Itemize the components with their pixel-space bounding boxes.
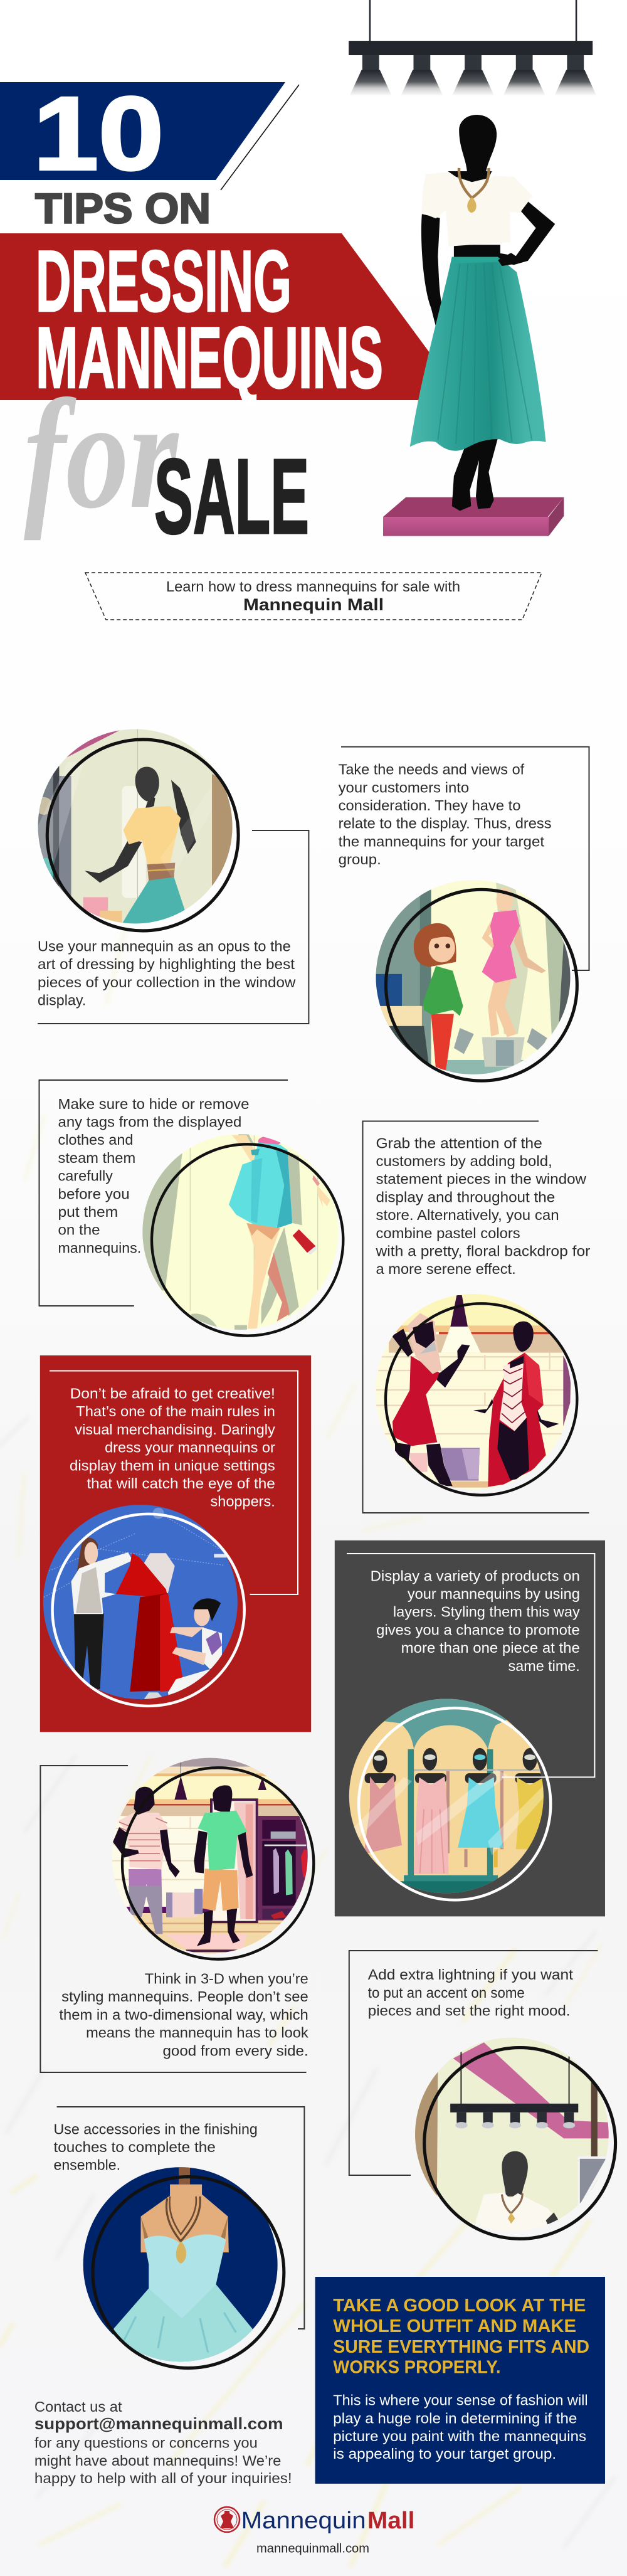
heading: final tip: [333, 2296, 589, 2378]
panel: tip 7 think in 3-D: [40, 1756, 314, 2072]
banner: number 10: [0, 76, 299, 192]
text: final tip body: This is where your sense of fashion will: [333, 2392, 588, 2409]
text: tip 9: Use accessories in the finishing: [54, 2121, 258, 2137]
callout: intro with dashed frame: Learn how to dress mannequins for sale with: [166, 578, 460, 595]
text: tip 7: [59, 1971, 308, 2059]
illustration: mannequin in window: [35, 726, 238, 931]
text: tip 3: put them: [58, 1204, 118, 1220]
text: tip 5: Don’t be afraid to get creative!: [70, 1385, 275, 1401]
pedestal: [383, 497, 564, 536]
text: tip 3: before you: [58, 1185, 130, 1202]
text: tip 3: steam them: [58, 1150, 135, 1166]
panel: tip 4 statement pieces: [362, 1121, 591, 1513]
panel: final tip on navy: [315, 2277, 605, 2484]
callout: intro with dashed frame: Mannequin Mall: [243, 595, 384, 614]
text: tip 5: shoppers.: [211, 1493, 275, 1510]
heading: final tip: WHOLE OUTFIT AND MAKE: [333, 2316, 576, 2336]
heading: tips on: TIPS ON: [35, 184, 211, 232]
panel: tip 1 window display: [35, 726, 308, 1024]
text: tip 3: on the: [58, 1222, 100, 1238]
text: tip 4: [375, 1135, 591, 1277]
text: tip 4: customers by adding bold,: [376, 1153, 552, 1169]
text: tip 2: relate to the display. Thus, dress: [339, 815, 552, 832]
text: contact information: happy to help with all of your inquiries!: [34, 2470, 292, 2486]
text: contact information: [34, 2398, 292, 2486]
text: tip 9: touches to complete the: [54, 2139, 216, 2155]
text: tip 1: pieces of your collection in the window: [38, 974, 296, 990]
text: tip 6: [371, 1567, 580, 1674]
text: tip 3: [58, 1096, 249, 1256]
text: tip 1: [38, 938, 296, 1009]
text: tip 3: Make sure to hide or remove: [58, 1096, 249, 1112]
text: tip 6: layers. Styling them this way: [393, 1604, 580, 1620]
text: tip 4: display and throughout the: [376, 1189, 555, 1205]
text: tip 6: gives you a chance to promote: [376, 1621, 580, 1638]
text: tip 4: with a pretty, floral backdrop for: [375, 1243, 591, 1259]
text: tip 4: statement pieces in the window: [376, 1171, 586, 1187]
text: tip 9: [54, 2121, 258, 2173]
panel: tip 9 accessories: [54, 2107, 304, 2368]
heading: for sale: SALE: [154, 437, 309, 556]
text: tip 7: styling mannequins. People don’t see: [61, 1988, 308, 2005]
callout: intro with dashed frame: [85, 573, 542, 620]
text: tip 3: any tags from the displayed: [58, 1114, 241, 1130]
text: tip 5: [70, 1385, 275, 1510]
banner: number 10: 10: [33, 76, 164, 192]
text: final tip body: play a huge role in determining if the: [333, 2410, 577, 2426]
text: tip 5: visual merchandising. Daringly: [75, 1421, 275, 1438]
illustration: accent lighting over mannequin: [412, 2037, 616, 2239]
text: tip 5: dress your mannequins or: [105, 1439, 275, 1456]
text: tip 1: art of dressing by highlighting the best: [38, 956, 295, 972]
text: tip 7: good from every side.: [163, 2042, 308, 2059]
text: contact information: support@mannequinmall.com: [34, 2414, 283, 2433]
text: tip 8: Add extra lightning if you want: [368, 1966, 574, 1983]
panel: tip 6 layers: [335, 1540, 605, 1916]
text: tip 4: Grab the attention of the: [376, 1135, 542, 1151]
text: tip 7: Think in 3-D when you’re: [145, 1971, 308, 1987]
text: tip 3: mannequins.: [58, 1239, 141, 1256]
text: tip 5: that will catch the eye of the: [87, 1475, 275, 1492]
text: final tip body: is appealing to your target group.: [333, 2446, 556, 2462]
heading: for sale: [24, 368, 309, 556]
text: tip 4: store. Alternatively, you can: [376, 1207, 559, 1223]
logo: Mannequin Mall: Mall: [367, 2508, 414, 2534]
text: tip 1: display.: [38, 992, 86, 1009]
text: tip 2: group.: [339, 851, 381, 867]
text: tip 6: same time.: [508, 1658, 580, 1674]
text: tip 3: clothes and: [58, 1132, 133, 1148]
text: tip 8: to put an accent on some: [368, 1985, 525, 2001]
heading: final tip: TAKE A GOOD LOOK AT THE: [333, 2296, 586, 2316]
text: tip 2: Take the needs and views of: [339, 761, 525, 778]
illustration: girl looking at mannequin: [374, 878, 577, 1081]
text: tip 4: combine pastel colors: [376, 1225, 520, 1241]
logo: Mannequin Mall: [214, 2507, 414, 2534]
text: tip 8: pieces and set the right mood.: [368, 2002, 571, 2018]
panel: tip 8 lighting: [349, 1951, 616, 2239]
panel: tip 2 customers: [339, 747, 589, 1081]
text: tip 2: consideration. They have to: [339, 797, 520, 814]
banner: dressing mannequins: DRESSING: [36, 233, 292, 330]
text: tip 8: [368, 1966, 574, 2018]
illustration: male mannequins in store: [111, 1756, 314, 1959]
text: contact information: Contact us at: [34, 2398, 122, 2415]
text: tip 5: display them in unique settings: [70, 1457, 275, 1473]
logo: Mannequin Mall: Mannequin: [241, 2508, 366, 2534]
text: tip 2: [339, 761, 552, 867]
illustration: skirt with tag: [141, 1133, 343, 1336]
text: final tip body: picture you paint with the mannequins: [333, 2428, 586, 2444]
heading: for sale: for: [24, 368, 179, 541]
illustration: bold red outfits: [374, 1292, 577, 1495]
text: tip 1: Use your mannequin as an opus to the: [38, 938, 291, 955]
text: final tip body: [333, 2392, 588, 2462]
illustration: stylists dressing a form: [40, 1503, 245, 1706]
text: contact information: for any questions or concerns you: [34, 2434, 258, 2451]
text: tip 3: carefully: [58, 1168, 113, 1184]
text: tip 5: That’s one of the main rules in: [76, 1403, 275, 1419]
panel: tip 3 hide tags: [39, 1080, 343, 1336]
heading: final tip: WORKS PROPERLY.: [333, 2358, 500, 2378]
banner: dressing mannequins: [0, 233, 440, 406]
illustration: shop window with layered dresses: [346, 1697, 551, 1900]
text: tip 2: the mannequins for your target: [339, 833, 545, 849]
icon: dress form badge: [214, 2507, 240, 2532]
heading: final tip: SURE EVERYTHING FITS AND: [333, 2337, 589, 2357]
text: tip 9: ensemble.: [54, 2157, 120, 2173]
text: contact information: might have about mannequins! We’re: [34, 2452, 281, 2469]
illustration: mannequin on pedestal: [383, 115, 564, 536]
text: tip 6: Display a variety of products on: [371, 1567, 580, 1584]
panel: tip 5 get creative: [40, 1355, 311, 1732]
text: tip 7: them in a two-dimensional way, which: [59, 2006, 308, 2023]
text: tip 6: your mannequins by using: [408, 1586, 580, 1602]
text: tip 7: means the mannequin has to look: [86, 2025, 308, 2041]
banner: dressing mannequins: MANNEQUINS: [36, 309, 383, 406]
icon: track light fixture: [349, 0, 597, 96]
text: tip 4: a more serene effect.: [376, 1261, 516, 1277]
text: tip 6: more than one piece at the: [401, 1640, 580, 1656]
illustration: dress form with necklace: [80, 2165, 284, 2368]
text: website: mannequinmall.com: [256, 2542, 369, 2555]
text: tip 2: your customers into: [339, 779, 469, 795]
